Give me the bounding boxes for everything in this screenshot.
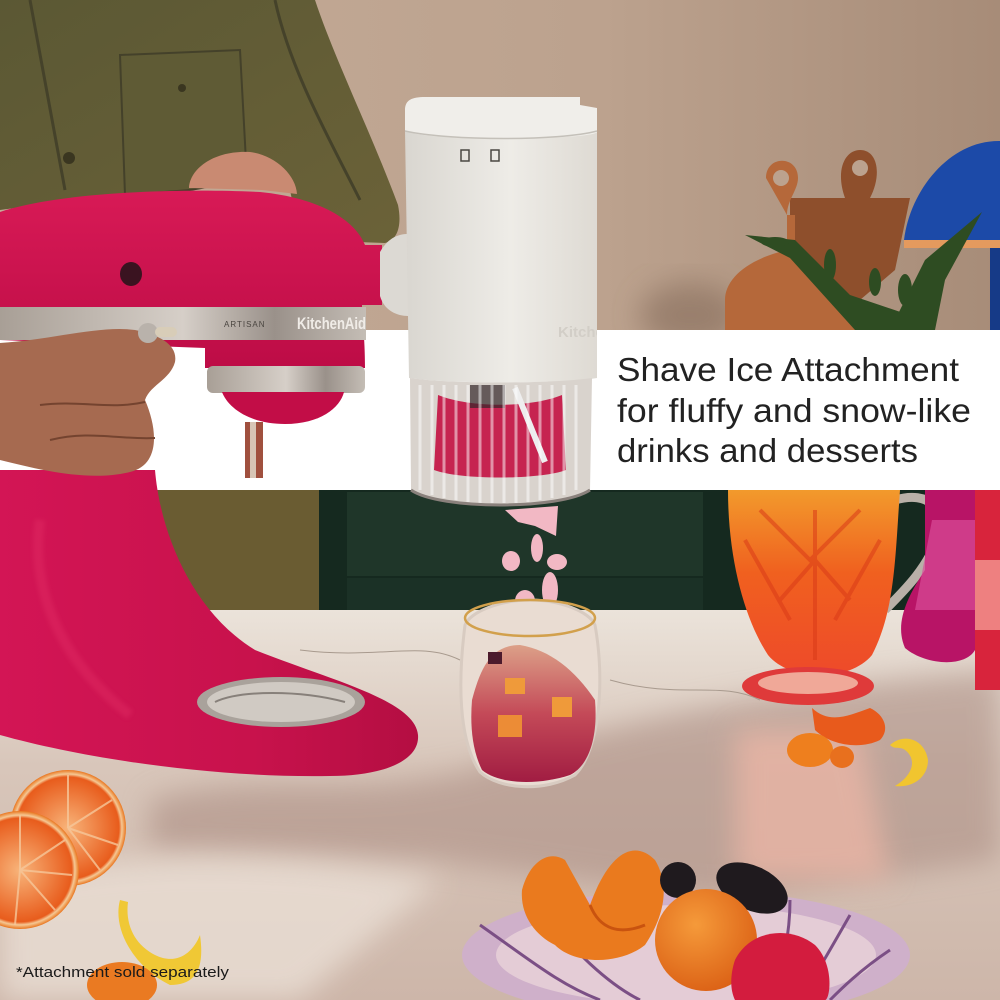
shave ice attachment: [405, 97, 597, 506]
mixer head: KitchenAid: [297, 314, 366, 333]
lemon twist and small orange: [87, 900, 201, 1000]
lower dark green wall: [0, 488, 1000, 618]
background wall: [0, 0, 1000, 347]
white caption band: [0, 330, 1000, 490]
blackberries: [660, 852, 796, 924]
tangerine peels and lemon twist: [787, 708, 928, 786]
mixer head: [0, 191, 382, 368]
halved blood oranges: [0, 770, 126, 929]
hand on speed lever: [0, 323, 177, 476]
attachment lid: [405, 97, 597, 138]
red flower: [731, 933, 829, 1000]
caption: for fluffy and snow-like: [617, 392, 971, 429]
attachment connector: [380, 234, 408, 316]
footnote: *Attachment sold separately: [16, 964, 230, 981]
pink glasses: [901, 490, 1000, 690]
fruit plate: [462, 850, 910, 1000]
caption: [617, 351, 971, 469]
blue lamp: [904, 141, 1000, 332]
mixer stand and base: [0, 470, 418, 776]
tangerine pieces: [522, 850, 664, 960]
marble counter: [0, 610, 1000, 1000]
attachment body: [405, 130, 597, 382]
clear ribbed chamber: [410, 378, 592, 505]
mixer head: ARTISAN: [224, 320, 266, 329]
mixer hub collar and beater shaft: [207, 366, 365, 478]
green leaves: [745, 212, 982, 330]
orange pitcher: [728, 490, 940, 705]
whole orange: [655, 889, 757, 991]
hand on top of mixer: [189, 152, 297, 194]
mixer base bowl plate: [197, 677, 365, 727]
glass of shaved ice: [461, 600, 600, 787]
falling ice flakes: [502, 506, 567, 612]
caption: Shave Ice Attachment: [617, 351, 959, 388]
caption: drinks and desserts: [617, 432, 918, 469]
attachment icons: [461, 150, 499, 161]
attachment logo: KitchenAid: [558, 324, 637, 341]
person in olive shirt: [0, 0, 399, 610]
cutting boards: [725, 150, 910, 330]
